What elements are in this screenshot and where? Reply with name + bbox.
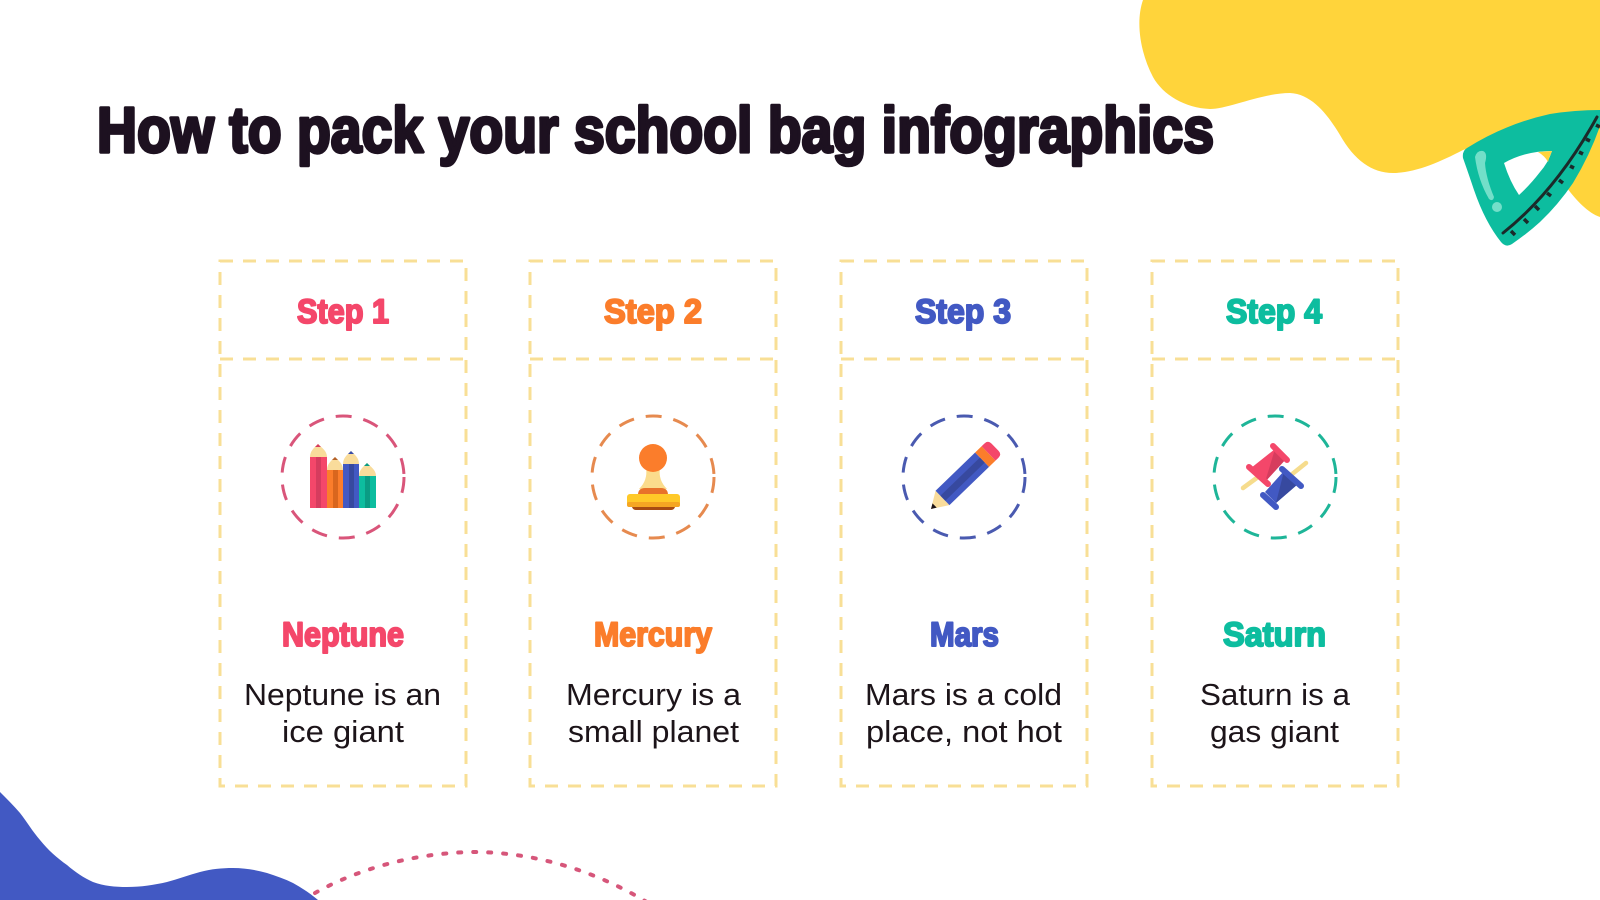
step 4 description: Saturn is a bbox=[1200, 677, 1351, 712]
step 2 name: Mercury bbox=[594, 616, 712, 654]
blue blob bottom left bbox=[0, 792, 318, 900]
step 3 name: Mars bbox=[930, 616, 999, 654]
step 1 heading: Step 1 bbox=[297, 293, 389, 331]
step 2 heading: Step 2 bbox=[604, 293, 702, 331]
step 4 description: gas giant bbox=[1210, 714, 1339, 749]
step 1 description bbox=[244, 677, 441, 749]
step 2 description: Mercury is a bbox=[566, 677, 742, 712]
panel: step 4 bbox=[1152, 261, 1398, 786]
icon: pencil bbox=[903, 416, 1025, 538]
icon: green set square bbox=[1463, 110, 1600, 246]
panel: step 2 bbox=[530, 261, 776, 786]
step 3 description bbox=[865, 677, 1062, 749]
step 1 description: Neptune is an bbox=[244, 677, 441, 712]
icon: stamp bbox=[592, 416, 714, 538]
step 2 description: small planet bbox=[568, 714, 739, 749]
step 4 description bbox=[1200, 677, 1351, 749]
yellow blob top right bbox=[1139, 0, 1600, 217]
dotted arc bottom bbox=[315, 852, 650, 900]
step 1 frame bbox=[220, 261, 466, 786]
step 3 description: Mars is a cold bbox=[865, 677, 1062, 712]
step 3 description: place, not hot bbox=[866, 714, 1062, 749]
panel: step 3 bbox=[841, 261, 1087, 786]
step 3 heading: Step 3 bbox=[915, 293, 1011, 331]
step 2 frame bbox=[530, 261, 776, 786]
step 3 frame bbox=[841, 261, 1087, 786]
step 1 description: ice giant bbox=[282, 714, 404, 749]
icon: push pins bbox=[1214, 416, 1336, 538]
step 1 name: Neptune bbox=[282, 616, 404, 654]
step 4 name: Saturn bbox=[1223, 616, 1326, 654]
icon: pencils bbox=[282, 416, 404, 538]
step 2 description bbox=[566, 677, 742, 749]
step 4 heading: Step 4 bbox=[1226, 293, 1322, 331]
panel: step 1 bbox=[220, 261, 466, 786]
step 4 frame bbox=[1152, 261, 1398, 786]
title: How to pack your school bag infographics bbox=[97, 94, 1214, 166]
